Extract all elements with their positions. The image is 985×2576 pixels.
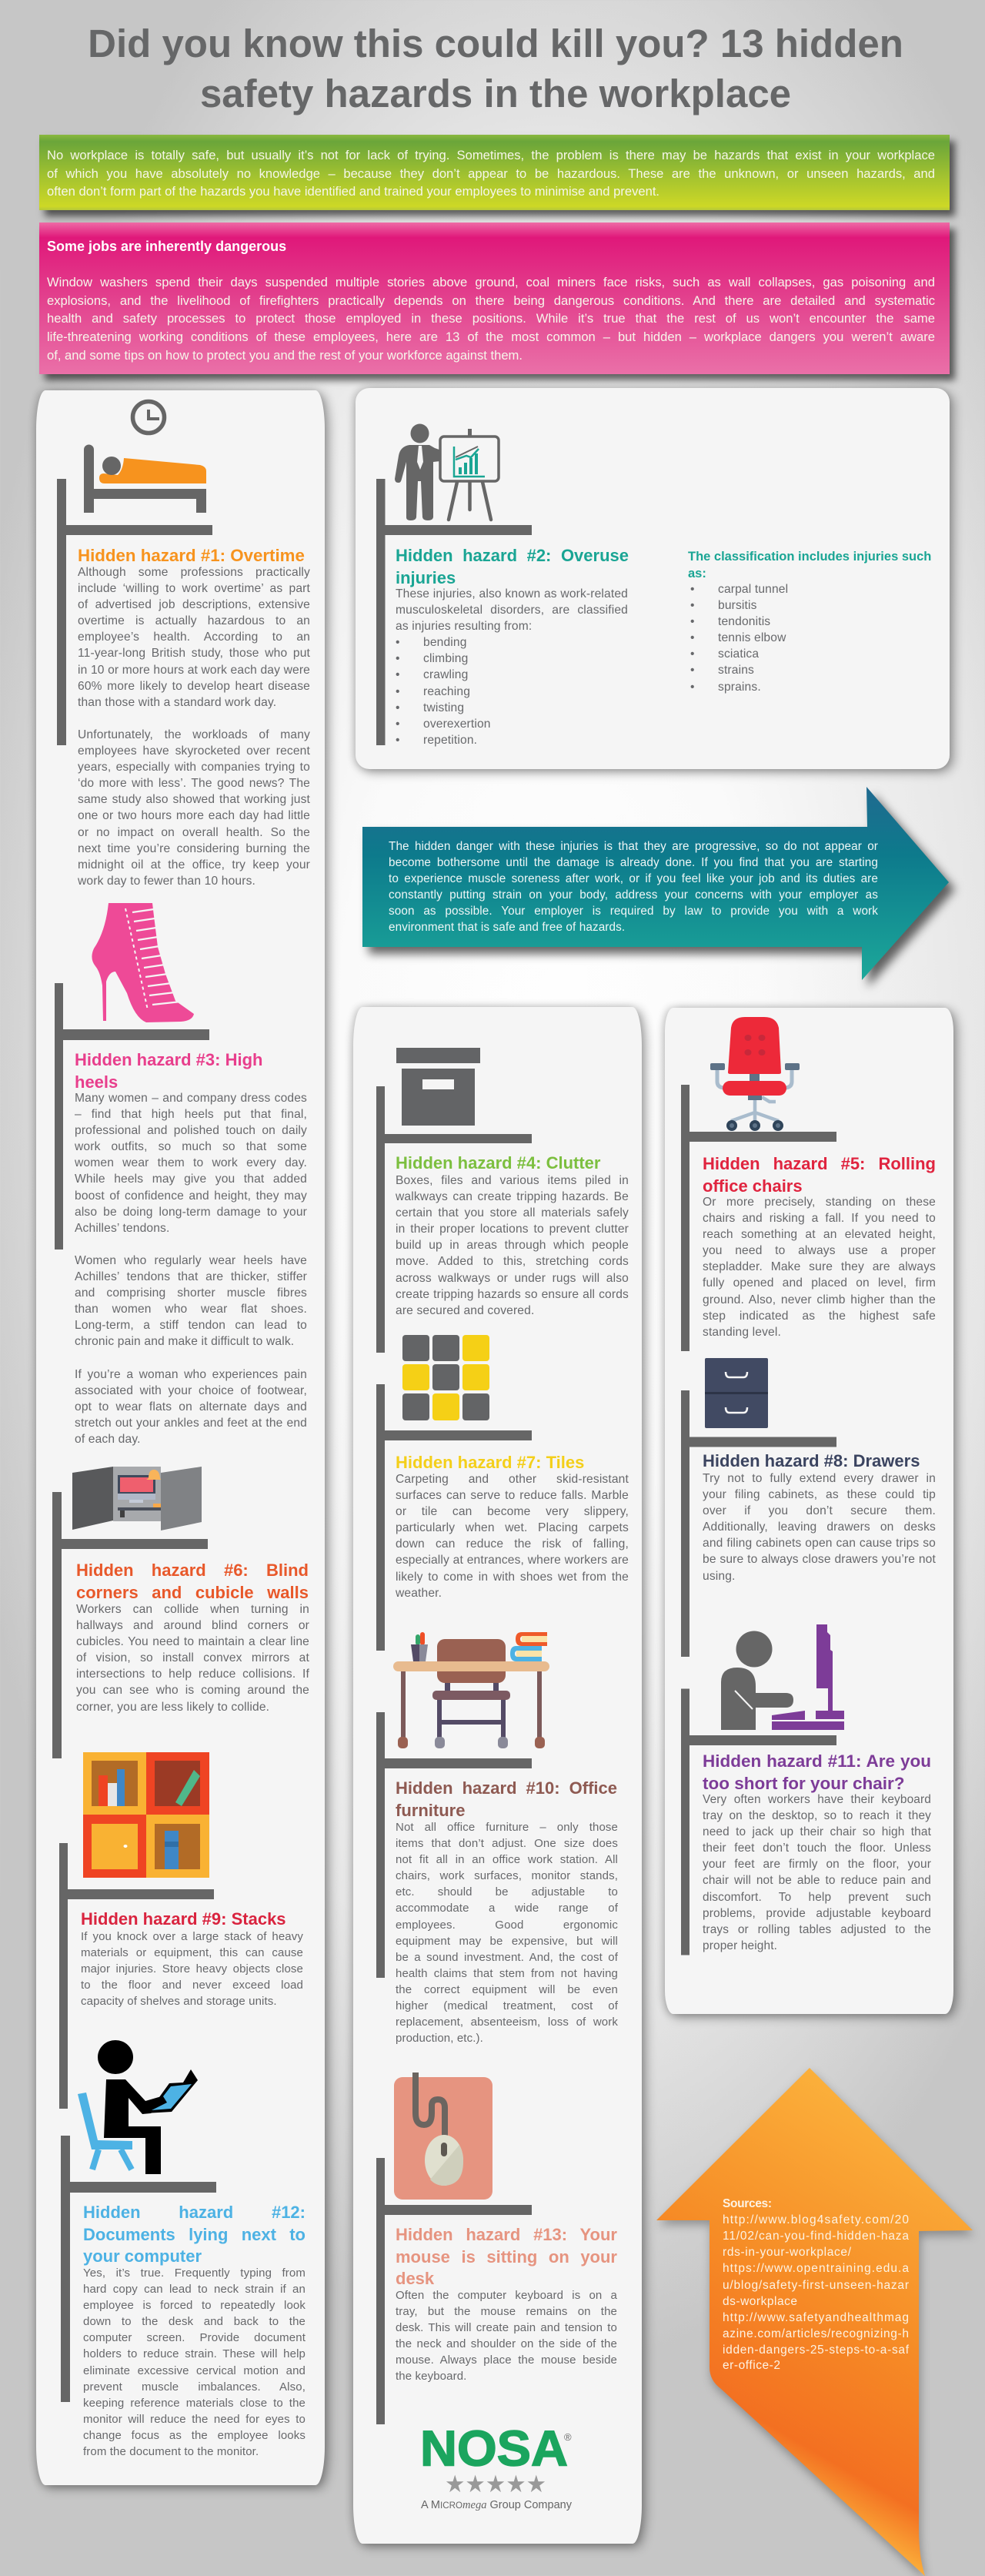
body: hazard 1: next time you’re considering burning the <box>78 842 310 855</box>
sources text: Sources: <box>723 2197 772 2210</box>
body: hazard 13: the neck and shoulder on the side of the <box>396 2337 617 2350</box>
body: hazard 2: • <box>396 636 400 649</box>
body: hazard 6: corner, you are less likely to collide. <box>76 1701 269 1714</box>
icon: archive box <box>376 1048 532 1353</box>
body: hazard 5: you need to always use a proper <box>703 1244 936 1257</box>
icon: clock and bed <box>57 399 212 745</box>
icon: mouse <box>373 2067 635 2425</box>
heading: hazard 13: desk <box>396 2269 434 2288</box>
logo: NOSA: NOSA <box>420 2420 568 2476</box>
hazard 6 <box>52 1467 309 1758</box>
heading: hazard 10 <box>396 1778 617 1820</box>
classification heading: The classification includes injuries such <box>688 550 931 564</box>
body: hazard 10: not fit all in an office work station. All <box>396 1853 618 1866</box>
body: hazard 2: • <box>396 685 400 698</box>
classification list: • <box>690 681 695 694</box>
body: hazard 11: chair will not be able to reduce pain and <box>703 1874 931 1887</box>
heading: hazard 9: Hidden hazard #9: Stacks <box>81 1909 286 1929</box>
body: hazard 10: be a sound investment. And, the cost of <box>396 1951 618 1964</box>
arrow shape: sources <box>656 2068 973 2576</box>
body: hazard 10: accommodate a wide range of <box>396 1902 618 1915</box>
sources text <box>723 2197 910 2372</box>
body: hazard 2: repetition. <box>423 734 477 747</box>
body: hazard 3: associated with your choice of footwear, <box>75 1384 307 1397</box>
classification list: • <box>690 631 695 644</box>
sources text: idden-dangers-25-steps-to-a-saf <box>723 2343 910 2357</box>
body: hazard 1: of advertised job descriptions, extensive <box>78 598 310 611</box>
classification list: • <box>690 615 695 628</box>
icon: high heel <box>55 903 209 1250</box>
body: hazard 9: capacity of shelves and storage units. <box>81 1995 277 2008</box>
sources text: http://www.safetyandhealthmag <box>723 2311 909 2324</box>
logo: NOSA: ★★★★★ <box>445 2471 546 2498</box>
sources text: u/blog/safety-first-unseen-hazar <box>723 2279 909 2292</box>
classification heading: as: <box>688 567 706 580</box>
title: Did you know this could kill you? 13 hidden <box>88 22 903 65</box>
body: hazard 2: • <box>396 701 400 714</box>
body: hazard 10: items that don’t adjust. One size does <box>396 1837 618 1850</box>
body: hazard 11: proper height. <box>703 1939 777 1952</box>
classification heading <box>688 550 931 580</box>
hazard 3 <box>55 903 307 1446</box>
body: some jobs: of, and some tips on how to protect you and the rest of your workforce against them. <box>47 348 523 363</box>
body: hazard 10: chairs, work surfaces, monitor stands, <box>396 1869 618 1882</box>
intro text: of which you have absolutely no knowledge – because they don’t appear to be hazardous. These are the unknown, or unseen hazards, and <box>47 166 935 181</box>
heading: hazard 7: Hidden hazard #7: Tiles <box>396 1453 584 1472</box>
body: hazard 3 <box>75 1092 307 1446</box>
panel: intro green <box>39 135 950 210</box>
arrow text: soon as possible. Your employer is required by law to provide you with a work <box>389 905 878 918</box>
body: hazard 2: as injuries resulting from: <box>396 620 532 633</box>
hazard 2 <box>376 423 931 747</box>
body: hazard 2: musculoskeletal disorders, are classified <box>396 604 628 617</box>
body: some jobs: life-threatening working conditions of these employees, here are 13 of the most common – but hidden – workplace dangers you weren’t aware <box>47 330 935 344</box>
heading: hazard 12: Hidden hazard #12: <box>83 2203 306 2222</box>
body: hazard 1: or no impact on overall health. So the <box>78 825 310 839</box>
body: hazard 4: Boxes, files and various items piled in <box>396 1174 629 1187</box>
body: hazard 1: same study also showed that working just <box>78 793 310 806</box>
body: some jobs: Window washers spend their days suspended multiple stories above ground, coal miners face risks, such as wall collapses, gas poisoning and <box>47 275 935 289</box>
body: hazard 11 <box>703 1791 931 1954</box>
body: hazard 10: Not all office furniture – only those <box>396 1821 618 1834</box>
body: hazard 2: • <box>396 734 400 747</box>
body: hazard 12: computer screen. Provide document <box>83 2331 306 2344</box>
body: hazard 10: employees. Good ergonomic <box>396 1919 618 1932</box>
body: hazard 1: in 10 or more hours at work each day were <box>78 664 310 677</box>
body: hazard 13 <box>396 2287 617 2385</box>
body: hazard 11: tray on the desktop, so to reach it they <box>703 1809 931 1822</box>
heading: hazard 4: Hidden hazard #4: Clutter <box>396 1153 600 1173</box>
classification list: strains <box>718 664 754 677</box>
body: hazard 3: boost of confidence and height, they may <box>75 1189 307 1203</box>
panel: right column <box>665 1008 953 2014</box>
body: hazard 10: equipment may be expensive, but will <box>396 1935 618 1948</box>
heading: hazard 10: furniture <box>396 1800 465 1820</box>
body: hazard 11: their feet don’t touch the floor. Unless <box>703 1842 931 1855</box>
heading: hazard 10: Hidden hazard #10: Office <box>396 1778 617 1798</box>
heading: hazard 12: Documents lying next to <box>83 2225 306 2243</box>
arrow text: to experience muscle soreness after work, or if you feel like your job and its duties are <box>389 872 878 885</box>
arrow shape <box>362 787 960 990</box>
arrow callout: hidden danger <box>362 787 960 990</box>
title <box>88 22 903 115</box>
body: hazard 13: the keyboard. <box>396 2370 466 2383</box>
heading: hazard 5 <box>703 1153 936 1197</box>
heading: hazard 5: Hidden hazard #5: Rolling <box>703 1154 936 1173</box>
body: hazard 8 <box>703 1470 936 1584</box>
body: hazard 1: years, especially with companies trying to <box>78 761 310 774</box>
body: hazard 5: standing level. <box>703 1326 781 1339</box>
heading: hazard 13 <box>396 2224 617 2290</box>
title: safety hazards in the workplace <box>200 72 791 115</box>
body: some jobs <box>47 275 935 363</box>
body: hazard 1: midnight oil at the office, try keep your <box>78 858 310 871</box>
heading: hazard 3: Hidden hazard #3: High <box>75 1050 262 1069</box>
body: hazard 3: and comprising shorter muscle fibres <box>75 1286 307 1300</box>
arrow text: The hidden danger with these injuries is that they are progressive, so do not appear or <box>389 840 878 853</box>
body: hazard 8: your filing cabinets, as these could tip <box>703 1488 936 1501</box>
body: hazard 11: need to jack up their chair so high that <box>703 1825 931 1838</box>
body: hazard 2: • <box>396 668 400 681</box>
body: hazard 2: bending <box>423 636 467 649</box>
body: hazard 6 <box>76 1603 309 1714</box>
body: hazard 2: • <box>396 652 400 665</box>
body: hazard 12: monitor will reduce the need for eyes to <box>83 2413 306 2426</box>
hazard 13 <box>373 2067 635 2425</box>
body: hazard 10: etc. should be adjustable to <box>396 1885 618 1899</box>
classification list: tennis elbow <box>718 631 786 644</box>
body: hazard 1: than those with a standard work day. <box>78 696 276 709</box>
logo: NOSA <box>416 2425 577 2514</box>
icon: desk and chair <box>376 1632 549 1978</box>
icon: filing cabinet <box>677 1355 943 1659</box>
heading: hazard 6 <box>76 1561 309 1601</box>
body: hazard 9: materials or equipment, this can cause <box>81 1946 303 1959</box>
body: hazard 9: If you knock over a large stack of heavy <box>81 1930 303 1943</box>
icon: shelves <box>59 1752 214 2109</box>
body: hazard 10: health claims that stem from not having <box>396 1967 618 1980</box>
body: hazard 1: 60% more likely to develop heart disease <box>78 680 310 693</box>
heading: hazard 12 <box>83 2203 306 2266</box>
body: hazard 12: down to the desk and back to the <box>83 2315 306 2328</box>
body: hazard 4: across walkways or under rugs will also <box>396 1272 629 1285</box>
body: hazard 3: also be doing long-term damage to your <box>75 1206 307 1219</box>
sources text: azine.com/articles/recognizing-h <box>723 2327 909 2340</box>
body: hazard 6: Workers can collide when turning in <box>76 1603 309 1616</box>
heading: hazard 2 <box>396 546 629 587</box>
hazard 12 <box>61 2040 306 2458</box>
sources arrow <box>656 2068 973 2576</box>
body: hazard 3: women wear them to work every day. <box>75 1156 307 1169</box>
body: hazard 2: reaching <box>423 685 470 698</box>
heading: hazard 12: your computer <box>83 2246 202 2266</box>
panel: middle column <box>353 1007 642 2544</box>
heading: hazard 1: Hidden hazard #1: Overtime <box>78 546 305 565</box>
logo: NOSA: ® <box>564 2431 572 2443</box>
body: hazard 12 <box>83 2267 306 2458</box>
sources text: https://www.opentraining.edu.a <box>723 2262 909 2275</box>
body: hazard 1: Although some professions practically <box>78 566 310 579</box>
body: hazard 8: Additionally, leaving drawers on desks <box>703 1521 936 1534</box>
body: hazard 6: hallways and around blind corners or <box>76 1619 309 1632</box>
body: hazard 2 <box>396 587 628 747</box>
intro text: No workplace is totally safe, but usually it’s not for lack of trying. Sometimes, the problem is there may be hazards that exist in your workplace <box>47 148 935 162</box>
body: hazard 11: Very often workers have their keyboard <box>703 1793 931 1806</box>
icon: office chair <box>677 1012 943 1351</box>
heading: hazard 2: injuries <box>396 568 456 587</box>
heading: some jobs: Some jobs are inherently dangerous <box>47 239 286 254</box>
hazard 9 <box>59 1752 303 2109</box>
body: hazard 11: your feet are firmly on the floor, your <box>703 1858 931 1871</box>
intro text <box>47 148 935 199</box>
body: hazard 5: reach something at an elevated height, <box>703 1228 936 1241</box>
body: some jobs: health and safety processes to protect those employed in these positions. While it’s true that the rest of us won’t encounter the same <box>47 311 935 326</box>
body: hazard 8: and filing cabinets open can cause trips so <box>703 1537 936 1550</box>
body: hazard 3: If you’re a woman who experiences pain <box>75 1368 307 1381</box>
body: hazard 7 <box>396 1473 629 1600</box>
classification list <box>690 583 788 694</box>
body: hazard 3: While heels may give you that added <box>75 1173 307 1186</box>
body: hazard 10 <box>396 1821 618 2045</box>
body: hazard 3: Long-term, a stiff tendon can lead to <box>75 1319 307 1332</box>
body: hazard 5: stepladder. Make sure they are always <box>703 1260 936 1273</box>
arrow text: become bothersome until the damage is already done. If you find that you are starting <box>389 856 878 869</box>
body: hazard 2: crawling <box>423 668 468 681</box>
body: hazard 6: cubicles. You need to maintain a clear line <box>76 1635 309 1648</box>
heading: hazard 5: office chairs <box>703 1176 803 1195</box>
intro text: often don’t form part of the hazards you have identified and trained your employees to minimise and prevent. <box>47 184 659 199</box>
body: hazard 12: hard copy can lead to neck strain if an <box>83 2283 306 2296</box>
classification list: • <box>690 647 695 661</box>
heading: hazard 11: too short for your chair? <box>703 1774 905 1792</box>
body: hazard 2: • <box>396 718 400 731</box>
body: hazard 10: replacement, absenteeism, loss of work <box>396 2016 618 2029</box>
body: hazard 1: ‘do more with less’. The good news? The <box>78 777 310 790</box>
hazard 4 <box>376 1048 629 1353</box>
sources text: er-office-2 <box>723 2359 780 2372</box>
body: hazard 1: employee’s health. According to an <box>78 631 310 644</box>
body: hazard 3: opt to wear flats on alternate days and <box>75 1400 307 1413</box>
heading: hazard 6: Hidden hazard #6: Blind <box>76 1561 309 1580</box>
body: hazard 10: the correct equipment will be even <box>396 1983 618 1996</box>
body: hazard 7: surfaces can serve to reduce falls. Marble <box>396 1489 629 1502</box>
body: hazard 2: climbing <box>423 652 468 665</box>
classification list: • <box>690 664 695 677</box>
body: hazard 12: change focus as the employee looks <box>83 2429 306 2442</box>
arrow text: environment that is safe and free of hazards. <box>389 921 625 934</box>
body: hazard 12: prevent muscle imbalances. Also, <box>83 2380 306 2394</box>
body: hazard 3: Achilles’ tendons. <box>75 1222 169 1235</box>
body: hazard 4: are secured and covered. <box>396 1304 534 1317</box>
body: hazard 1: one or two hours more each day had little <box>78 809 310 822</box>
heading: hazard 11 <box>703 1751 931 1795</box>
heading: hazard 2: Hidden hazard #2: Overuse <box>396 546 629 565</box>
body: hazard 4 <box>396 1174 629 1317</box>
body: hazard 12: Yes, it’s true. Frequently typing from <box>83 2267 306 2280</box>
body: hazard 11: trays or rolling tables adjusted to the <box>703 1923 931 1936</box>
body: hazard 8: Try not to fully extend every drawer in <box>703 1472 936 1485</box>
body: hazard 7: weather. <box>396 1587 442 1600</box>
sources text: rds-in-your-workplace/ <box>723 2246 852 2259</box>
body: hazard 8: be sure to always close drawers you’re not <box>703 1553 936 1566</box>
hazard 7 <box>376 1335 629 1651</box>
body: hazard 3: work outfits, so much so that some <box>75 1140 307 1153</box>
logo: NOSA: A MICROmega Group Company <box>421 2498 572 2511</box>
arrow text <box>389 840 878 934</box>
body: hazard 10: production, etc.). <box>396 2032 483 2045</box>
body: hazard 1: employees have skyrocketed over recent <box>78 744 310 758</box>
body: hazard 2: twisting <box>423 701 464 714</box>
classification list: tendonitis <box>718 615 770 628</box>
body: hazard 7: down can reduce the risk of falling, <box>396 1537 629 1551</box>
panel: left column <box>36 390 325 2485</box>
body: hazard 4: in their proper locations to prevent clutter <box>396 1223 629 1236</box>
body: hazard 5: chairs and risking a fall. If you need to <box>703 1212 936 1225</box>
heading: hazard 3 <box>75 1050 262 1092</box>
hazard 11 <box>677 1621 943 1959</box>
hazard 1 <box>57 399 310 888</box>
body: hazard 5 <box>703 1194 936 1340</box>
body: hazard 11: problems, provide adjustable keyboard <box>703 1907 931 1920</box>
icon: presenter and chart <box>376 423 532 745</box>
body: hazard 13: desk. This will create pain and tension to <box>396 2321 617 2334</box>
sources text: 11/02/can-you-find-hidden-haza <box>723 2230 909 2243</box>
body: hazard 11: discomfort. To help prevent such <box>703 1891 931 1904</box>
classification list: • <box>690 599 695 612</box>
icon: person reading documents <box>61 2040 216 2402</box>
body: hazard 5: step indicated as the highest safe <box>703 1310 936 1323</box>
body: hazard 3: chronic pain and make it difficult to walk. <box>75 1335 294 1348</box>
body: hazard 6: of vision, so install convex mirrors at <box>76 1651 309 1664</box>
heading: hazard 6: corners and cubicle walls <box>76 1583 309 1601</box>
body: hazard 1: include ‘willing to work overtime’ as part <box>78 582 310 595</box>
heading: hazard 8: Hidden hazard #8: Drawers <box>703 1451 920 1470</box>
body: hazard 2: These injuries, also known as work-related <box>396 587 628 601</box>
body: hazard 4: create tripping hazards so ensure all cords <box>396 1288 629 1301</box>
arrow text: constantly putting strain on your body, address your concerns with your employer as <box>389 888 878 902</box>
body: hazard 5: Or more precisely, standing on these <box>703 1196 936 1209</box>
body: hazard 6: intersections to help reduce collisions. If <box>76 1668 309 1681</box>
body: hazard 7: especially at entrances, where workers are <box>396 1554 629 1567</box>
body: hazard 1 <box>78 566 310 888</box>
body: hazard 4: walkways can create tripping hazards. Be <box>396 1190 629 1203</box>
body: hazard 1: Unfortunately, the workloads of many <box>78 728 310 741</box>
hazard 8 <box>677 1355 943 1659</box>
hazard 5 <box>677 1012 943 1351</box>
body: some jobs: explosions, and the livelihood of firefighters practically depends on there being dangerous conditions. And there are detailed and systematic <box>47 293 935 308</box>
body: hazard 4: build up in areas through which people <box>396 1239 629 1252</box>
body: hazard 13: mouse. Always place the mouse beside <box>396 2354 617 2367</box>
body: hazard 3: Achilles’ tendons that are thicker, stiffer <box>75 1270 307 1283</box>
body: hazard 13: Often the computer keyboard is on a <box>396 2289 617 2302</box>
body: hazard 12: holders to reduce strain. These will help <box>83 2347 306 2360</box>
icon: person at computer <box>677 1621 943 1959</box>
body: hazard 12: keeping reference materials close to the <box>83 2397 306 2410</box>
classification list: sprains. <box>718 681 761 694</box>
heading: hazard 13: mouse is sitting on your <box>396 2246 617 2267</box>
heading: hazard 13: Hidden hazard #13: Your <box>396 2225 617 2244</box>
body: hazard 3: than women who wear flat shoes. <box>75 1303 307 1316</box>
body: hazard 1: work day to fewer than 10 hours. <box>78 875 255 888</box>
hazard 10 <box>376 1632 618 2045</box>
body: hazard 8: over if you don’t secure them. <box>703 1504 936 1517</box>
body: hazard 7: particularly when wet. Placing carpets <box>396 1521 629 1534</box>
body: hazard 3: Women who regularly wear heels have <box>75 1254 307 1267</box>
body: hazard 5: fully opened and placed on level, firm <box>703 1276 936 1290</box>
icon: tiles <box>376 1335 532 1651</box>
heading: hazard 11: Hidden hazard #11: Are you <box>703 1751 931 1771</box>
icon: cubicle <box>52 1467 208 1758</box>
body: hazard 3: Many women – and company dress codes <box>75 1092 307 1105</box>
body: hazard 4: certain that you store all materials safely <box>396 1206 629 1219</box>
body: hazard 7: or tile can become very slippery, <box>396 1505 629 1518</box>
body: hazard 9: major injuries. Store heavy objects close <box>81 1962 303 1975</box>
heading: hazard 3: heels <box>75 1072 118 1092</box>
body: hazard 1: 11-year-long British study, those who put <box>78 647 310 660</box>
body: hazard 3: – find that high heels put that final, <box>75 1108 307 1121</box>
classification list: bursitis <box>718 599 757 612</box>
classification list: • <box>690 583 695 596</box>
classification list: sciatica <box>718 647 759 661</box>
body: hazard 1: overtime is actually hazardous to an <box>78 614 310 627</box>
body: hazard 12: from the document to the monitor. <box>83 2445 259 2458</box>
body: hazard 13: tray, but the mouse remains on the <box>396 2305 617 2318</box>
body: hazard 7: Carpeting and other skid-resistant <box>396 1473 629 1486</box>
body: hazard 8: using. <box>703 1570 736 1583</box>
body: hazard 9 <box>81 1930 303 2008</box>
panel: hazard 2 <box>356 388 950 769</box>
body: hazard 9: to the floor and never exceed load <box>81 1979 303 1992</box>
body: hazard 4: move. Added to this, stretching cords <box>396 1255 629 1268</box>
classification list: carpal tunnel <box>718 583 788 596</box>
body: hazard 12: employee is forced to repeatedly look <box>83 2299 306 2312</box>
body: hazard 2: overexertion <box>423 718 491 731</box>
sources text: http://www.blog4safety.com/20 <box>723 2213 909 2226</box>
body: hazard 3: professional and polished touch on daily <box>75 1124 307 1137</box>
body: hazard 3: of each day. <box>75 1433 141 1446</box>
body: hazard 12: eliminate excessive cervical motion and <box>83 2364 306 2377</box>
body: hazard 3: stretch out your ankles and feet at the end <box>75 1417 307 1430</box>
body: hazard 6: you can see who is coming around the <box>76 1684 309 1697</box>
body: hazard 10: higher (medical treatment, cost of <box>396 1999 618 2012</box>
panel: some jobs are inherently dangerous <box>39 222 950 374</box>
sources text: ds-workplace <box>723 2295 797 2308</box>
body: hazard 5: ground. Also, never climb higher than the <box>703 1293 936 1306</box>
body: hazard 7: likely to come in with shoes wet from the <box>396 1571 629 1584</box>
